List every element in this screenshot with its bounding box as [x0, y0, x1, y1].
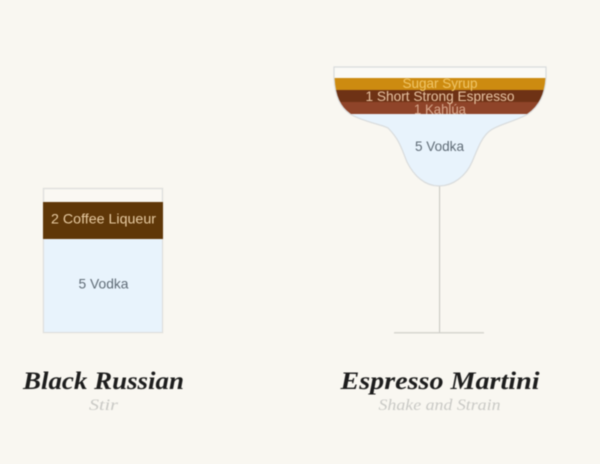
- label: 2 Coffee Liqueur: 2 Coffee Liqueur: [51, 210, 156, 226]
- label: 5 Vodka: 5 Vodka: [78, 276, 129, 292]
- label: Sugar Syrup: Sugar Syrup: [402, 75, 478, 91]
- layer: vodka: [44, 239, 162, 332]
- layer: vodka: [353, 114, 525, 186]
- layer: espresso: [330, 90, 550, 102]
- subheading: Shake and Strain: Shake and Strain: [378, 397, 501, 414]
- illustration: Black Russian glass: [43, 188, 163, 332]
- glass outline: [334, 67, 546, 186]
- subheading: Stir: Stir: [89, 397, 119, 414]
- heading: Espresso Martini: Espresso Martini: [339, 368, 540, 395]
- heading: Black Russian: Black Russian: [22, 368, 184, 395]
- glass bowl: [334, 77, 546, 186]
- layer: coffee liqueur: [43, 202, 163, 239]
- layer: sugar syrup: [330, 78, 550, 90]
- layer: foam: [330, 67, 550, 78]
- stem: [438, 185, 441, 333]
- illustration: Espresso Martini glass: [330, 67, 550, 333]
- label: 5 Vodka: 5 Vodka: [415, 138, 464, 154]
- label: 1 Short Strong Espresso: 1 Short Strong Espresso: [366, 88, 515, 104]
- glass body: [44, 188, 162, 332]
- layer: kahlua: [330, 102, 550, 114]
- label: 1 Kahlua: 1 Kahlúa: [414, 101, 466, 117]
- base: [394, 332, 484, 333]
